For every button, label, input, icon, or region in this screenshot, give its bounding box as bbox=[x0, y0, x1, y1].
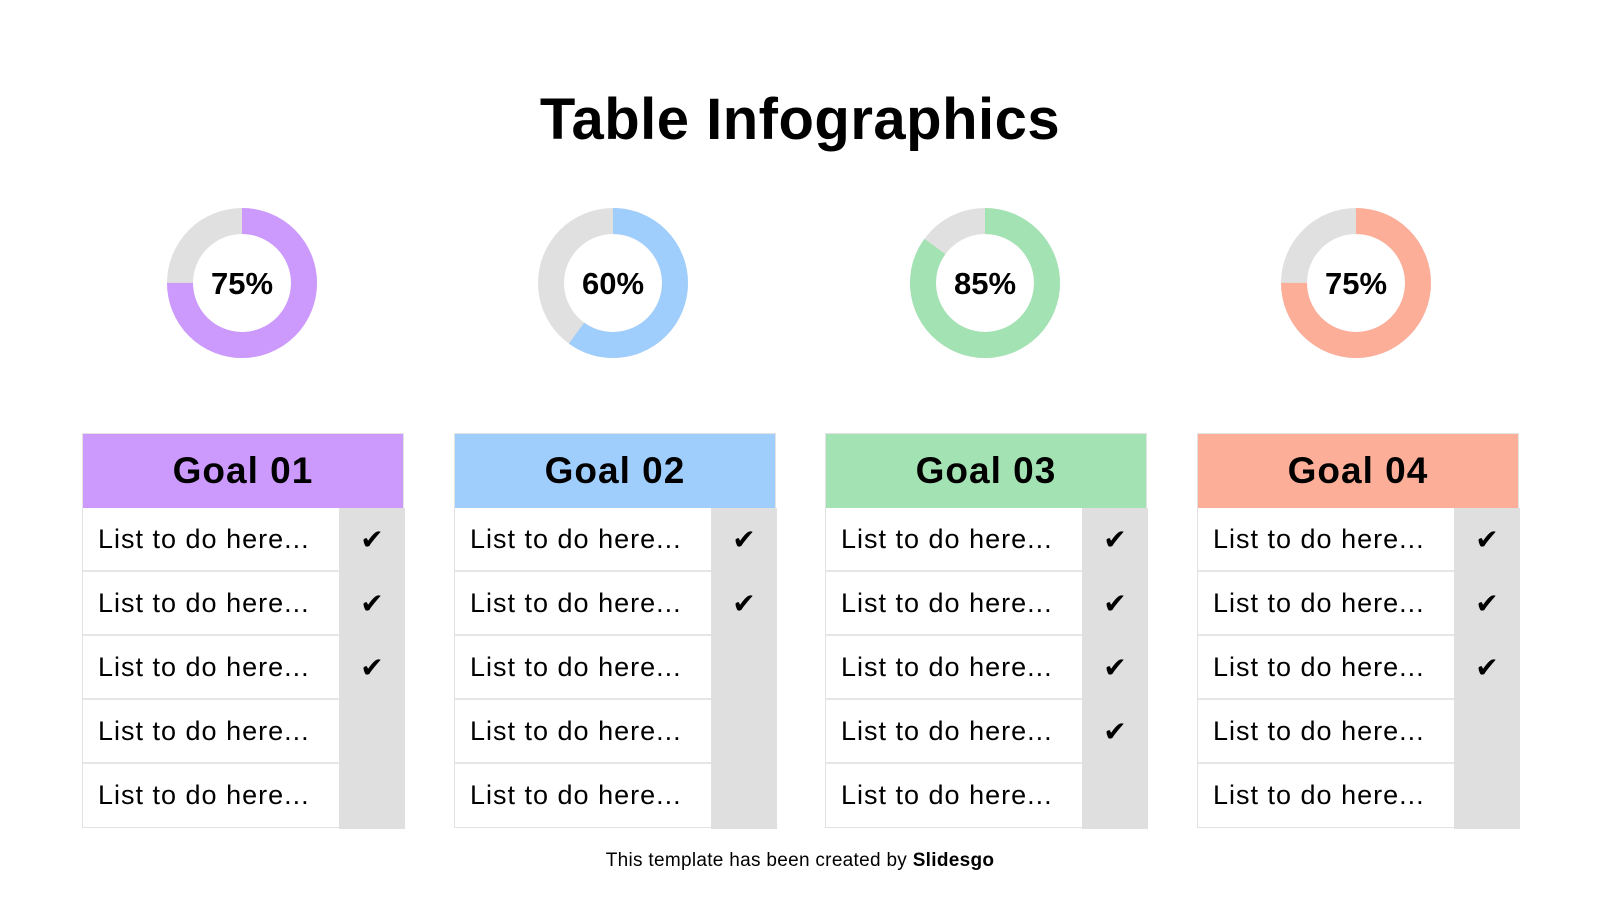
panel: goal 03: List to do here... bbox=[841, 716, 1053, 746]
header: goal 01 bbox=[83, 434, 403, 508]
panel: goal 02: List to do here... bbox=[470, 652, 682, 682]
panel: goal 04: ✔ bbox=[1475, 588, 1499, 619]
panel: goal 01: List to do here... bbox=[98, 716, 310, 746]
panel: goal 03: ✔ bbox=[1103, 524, 1127, 555]
header: goal 02: Goal 02 bbox=[545, 450, 685, 491]
panel: goal 02: ✔ bbox=[732, 588, 756, 619]
panel: goal 03: List to do here... bbox=[841, 780, 1053, 810]
donut: 75% salmon: 75% bbox=[1325, 266, 1387, 301]
donut: 60% blue bbox=[538, 208, 688, 358]
header: goal 02 bbox=[455, 434, 775, 508]
panel: goal 02: List to do here... bbox=[470, 780, 682, 810]
panel: goal 03: List to do here... bbox=[841, 652, 1053, 682]
panel: goal 02: List to do here... bbox=[470, 716, 682, 746]
panel: goal 03: ✔ bbox=[1103, 588, 1127, 619]
panel: goal 04: List to do here... bbox=[1213, 652, 1425, 682]
panel: goal 02: List to do here... bbox=[470, 588, 682, 618]
panel: goal 03: ✔ bbox=[1103, 716, 1127, 747]
header: goal 03: Goal 03 bbox=[916, 450, 1056, 491]
panel: goal 01: List to do here... bbox=[98, 652, 310, 682]
panel: goal 01 bbox=[82, 433, 404, 828]
header: goal 03 bbox=[826, 434, 1146, 508]
header: goal 04: Goal 04 bbox=[1288, 450, 1428, 491]
header: goal 01: Goal 01 bbox=[173, 450, 313, 491]
panel: goal 04: List to do here... bbox=[1213, 524, 1425, 554]
panel: goal 01: List to do here... bbox=[98, 524, 310, 554]
donut: 85% green: 85% bbox=[954, 266, 1016, 301]
panel: goal 04: List to do here... bbox=[1213, 588, 1425, 618]
panel: goal 04: List to do here... bbox=[1213, 780, 1425, 810]
donut: 60% blue: 60% bbox=[582, 266, 644, 301]
panel: goal 01: ✔ bbox=[360, 524, 384, 555]
donut: 85% green bbox=[910, 208, 1060, 358]
header: goal 04 bbox=[1198, 434, 1518, 508]
panel: goal 01: List to do here... bbox=[98, 588, 310, 618]
panel: goal 04: ✔ bbox=[1475, 524, 1499, 555]
donut: 75% salmon bbox=[1281, 208, 1431, 358]
panel: goal 03: List to do here... bbox=[841, 524, 1053, 554]
panel: goal 03: List to do here... bbox=[841, 588, 1053, 618]
panel: goal 04: ✔ bbox=[1475, 652, 1499, 683]
title: Table Infographics bbox=[540, 87, 1060, 152]
panel: goal 03: ✔ bbox=[1103, 652, 1127, 683]
panel: goal 04 bbox=[1197, 433, 1519, 828]
panel: goal 01: ✔ bbox=[360, 588, 384, 619]
donut: 75% purple: 75% bbox=[211, 266, 273, 301]
panel: goal 02 bbox=[454, 433, 776, 828]
panel: goal 04: List to do here... bbox=[1213, 716, 1425, 746]
panel: goal 03 bbox=[825, 433, 1147, 828]
panel: goal 01: ✔ bbox=[360, 652, 384, 683]
panel: goal 02: List to do here... bbox=[470, 524, 682, 554]
panel: goal 02: ✔ bbox=[732, 524, 756, 555]
footer credit: This template has been created by Slidesgo bbox=[606, 850, 994, 871]
donut: 75% purple bbox=[167, 208, 317, 358]
panel: goal 01: List to do here... bbox=[98, 780, 310, 810]
